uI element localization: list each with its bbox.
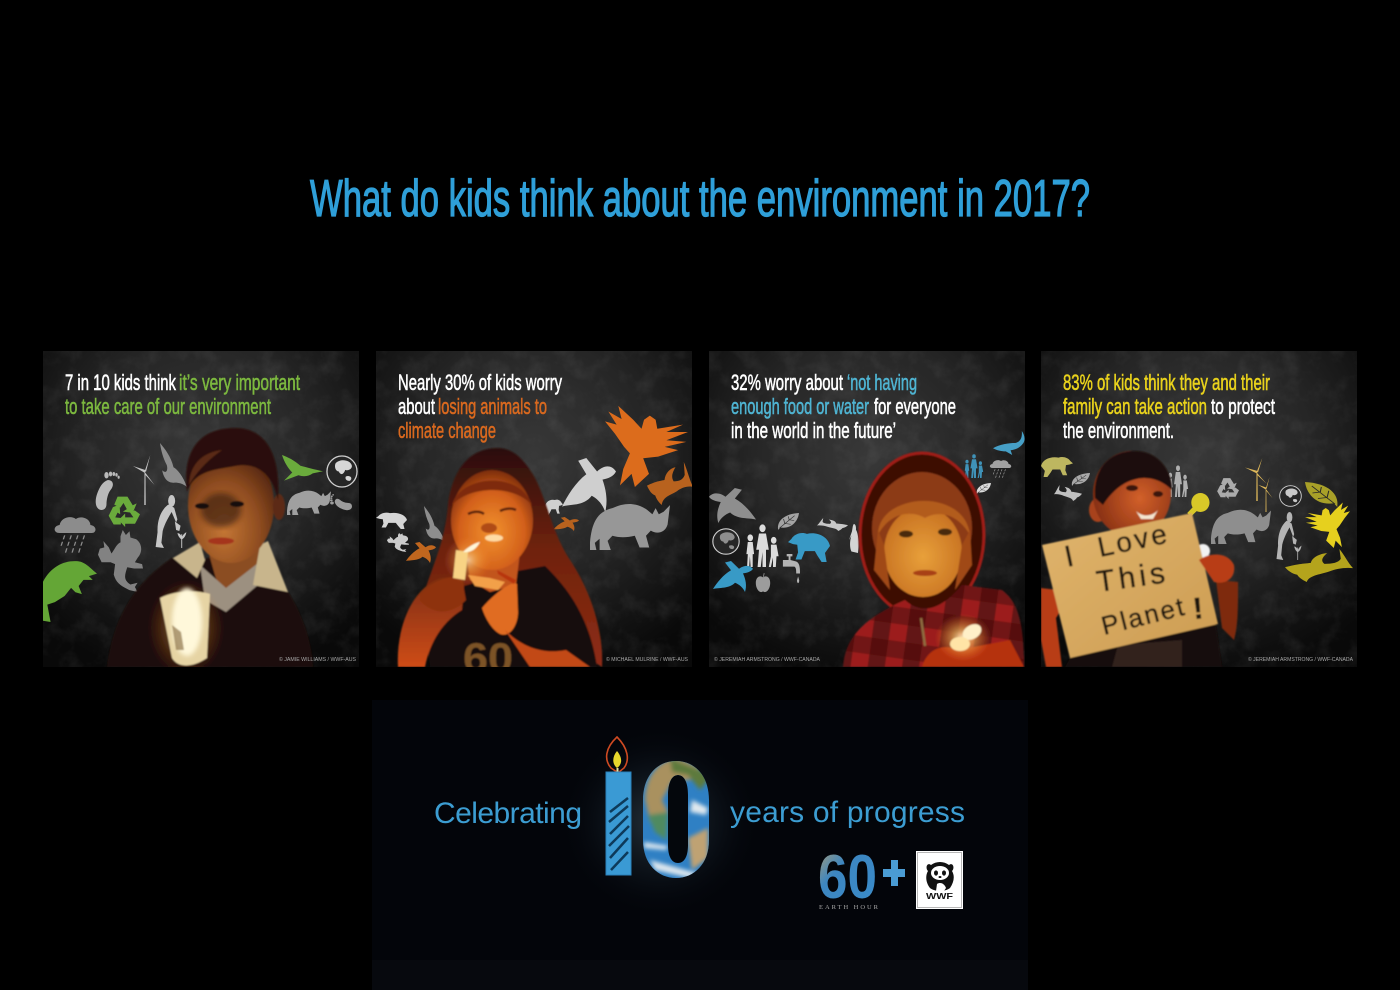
icon: blue bear	[788, 533, 830, 562]
handwritten sign text: !	[1191, 592, 1205, 626]
icon: globe	[1280, 486, 1301, 506]
logo: 60+ earth hour: 60	[818, 843, 877, 912]
icon: green bird	[282, 455, 323, 481]
handwritten sign text	[1062, 517, 1205, 641]
panel text: the environment.	[1063, 418, 1174, 443]
text: celebrating: Celebrating	[434, 797, 582, 830]
icon: earth 0	[640, 758, 712, 882]
icon: recycling arrows	[1217, 478, 1239, 499]
panel: 83% of kids think they can take action	[1041, 351, 1357, 667]
panel text	[398, 370, 562, 443]
icon: blue dolphin	[993, 431, 1025, 455]
panel: 7 in 10 kids think it's very important	[43, 351, 359, 676]
icon: hawk	[160, 443, 187, 487]
icon: white frog	[387, 533, 409, 552]
panel text: ‘not having	[847, 370, 917, 395]
panel text: 32% worry about	[731, 370, 843, 395]
handwritten sign text: Planet	[1098, 591, 1188, 641]
panel text	[1063, 370, 1275, 443]
icon: gardener	[156, 495, 186, 548]
icon: white dolphin	[817, 518, 848, 531]
icon: wind turbines	[1245, 458, 1272, 512]
photo credit: © JEREMIAH ARMSTRONG / WWF-CANADA	[1248, 656, 1354, 663]
handwritten sign text: I	[1062, 540, 1077, 574]
icon: apple	[756, 573, 770, 592]
icon: globe	[327, 456, 357, 487]
icon: footprint sideways	[330, 494, 352, 510]
panel text: for everyone	[874, 394, 956, 419]
icon: wind turbine	[133, 455, 155, 505]
icon: water tap	[783, 554, 800, 583]
icon: white family	[746, 524, 779, 567]
photo: boy holding candle	[107, 428, 313, 676]
icon: light bulb	[1187, 493, 1210, 517]
icon: grey leaf	[1072, 473, 1090, 486]
panel: 32% worry about food or water	[709, 351, 1025, 667]
icon: yellow parrot	[1305, 502, 1350, 548]
panel text	[65, 370, 300, 419]
photo credit: © MICHAEL MULRINE / WWF-AUS	[606, 656, 689, 663]
icon: blue family	[965, 454, 983, 478]
icon: rain cloud	[990, 460, 1011, 478]
icon: penguin	[849, 524, 859, 553]
icon: rhino	[287, 491, 331, 515]
icon: grey leaf	[778, 513, 799, 530]
icon: gardener	[1277, 512, 1301, 560]
infographic canvas	[43, 178, 1357, 990]
panel text: 7 in 10 kids think	[65, 370, 177, 395]
icon: orange parrot	[605, 406, 688, 487]
icon: olive whale	[1285, 549, 1353, 582]
logo: 60+ earth hour: EARTH HOUR	[819, 904, 879, 911]
text: years of progress: years of progress	[730, 796, 965, 829]
icon: rain cloud	[55, 517, 96, 553]
panel text: it’s very important	[179, 370, 300, 395]
panel text: losing animals to	[438, 394, 547, 419]
icon: candle forming the 1	[606, 737, 631, 875]
photo credit: © JEREMIAH ARMSTRONG / WWF-CANADA	[714, 656, 821, 663]
icon: globe	[713, 529, 739, 554]
icon: hawk	[424, 506, 444, 540]
icon: white bear	[376, 513, 407, 529]
icon: rhino	[590, 504, 670, 550]
panel: nearly 30% of kids worry	[376, 351, 693, 681]
logo: wwf panda: WWF	[926, 891, 953, 901]
panel text: 83% of kids think they and their	[1063, 370, 1270, 395]
icon: white turtle	[562, 458, 616, 512]
panel text: Nearly 30% of kids worry	[398, 370, 562, 395]
photo: girl holding candle: 60	[463, 634, 513, 681]
panel text: family can take action	[1063, 394, 1207, 419]
panel text: to take care of our environment	[65, 394, 271, 419]
photo: boy holding sign	[1041, 451, 1238, 667]
icon: footprint	[96, 472, 120, 510]
icon: grey turtle	[709, 488, 756, 523]
icon: grey family	[1168, 465, 1188, 497]
panel text: about	[398, 394, 435, 419]
panel text	[731, 370, 956, 443]
panel text: in the world in the future’	[731, 418, 896, 443]
icon: olive leaf	[1305, 482, 1337, 507]
icon: orange turtle	[406, 542, 436, 563]
panel: earth hour banner	[372, 700, 1028, 990]
icon: blue turtle	[713, 561, 753, 592]
icon: green bear	[43, 561, 97, 622]
logo: wwf panda	[916, 851, 963, 909]
panel text: climate change	[398, 418, 496, 443]
photo: girl holding candle	[398, 448, 602, 681]
icon: white dolphin	[1054, 485, 1082, 501]
panel text: to protect	[1211, 394, 1275, 419]
icon: orange shark	[647, 462, 693, 505]
icon: recycling arrows	[109, 497, 140, 527]
icon: white leaf	[977, 483, 991, 494]
icon: small white bear	[545, 500, 563, 515]
handwritten sign text: This	[1094, 556, 1171, 599]
icon: olive bear	[1041, 457, 1073, 477]
photo credit: © JAMIE WILLIAMS / WWF-AUS	[279, 656, 357, 663]
icon: rhino	[1211, 510, 1271, 544]
panel text: enough food or water	[731, 394, 869, 419]
icon: small orange turtle	[553, 517, 579, 531]
handwritten sign text: Love	[1095, 517, 1172, 563]
photo: girl in red hood	[843, 453, 1024, 667]
icon: frog	[98, 530, 143, 592]
